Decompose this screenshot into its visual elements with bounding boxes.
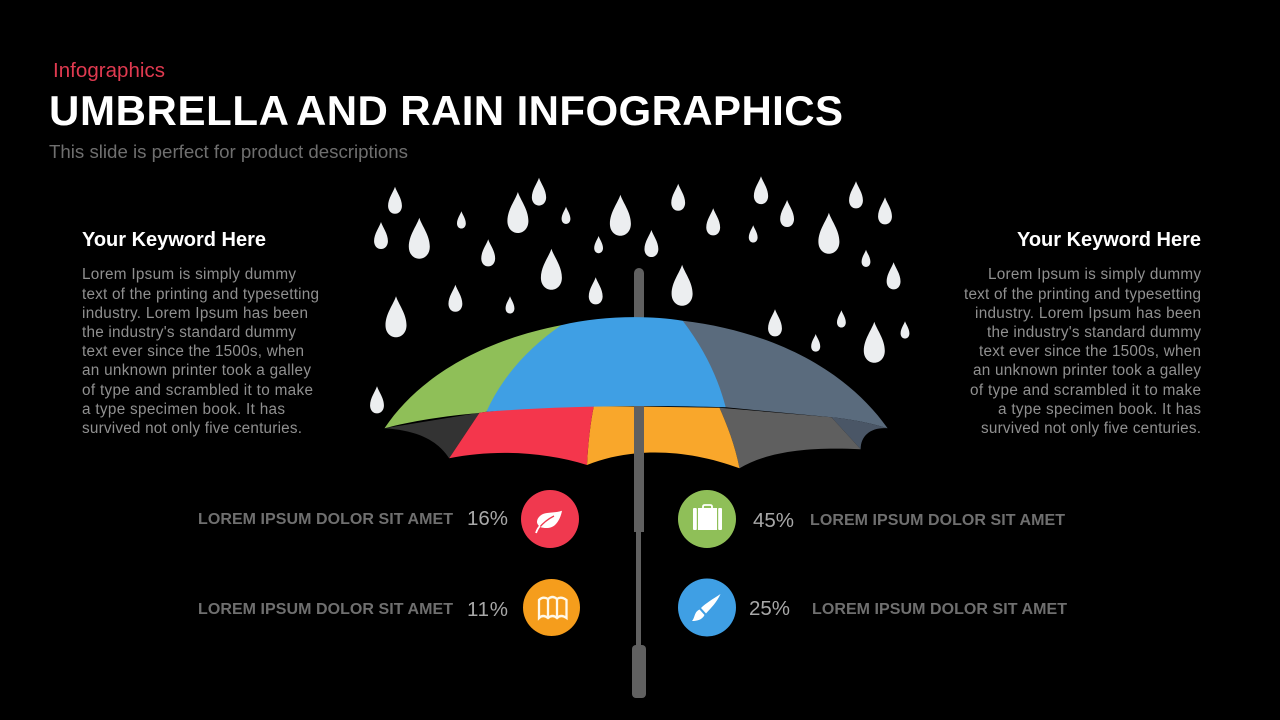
title: AND RAIN INFOGRAPHICS <box>296 87 843 134</box>
icon: map <box>523 579 580 636</box>
umbrella panel: dark slate flap <box>831 417 888 449</box>
icon: paint brush <box>678 578 736 636</box>
item: 45% <box>678 490 1065 548</box>
label: LOREM IPSUM DOLOR SIT AMET <box>812 601 1067 618</box>
left body text: industry. Lorem Ipsum has been <box>82 305 308 322</box>
value: 25% <box>749 597 790 620</box>
item: 25% <box>678 578 1067 636</box>
right body text: survived not only five centuries. <box>981 420 1201 437</box>
right body text: text of the printing and typesetting <box>964 286 1201 303</box>
icon: leaf <box>521 490 579 548</box>
value: 11% <box>467 598 508 621</box>
umbrella panel: green <box>384 325 600 428</box>
label: LOREM IPSUM DOLOR SIT AMET <box>810 512 1065 529</box>
umbrella panel: slate <box>683 321 888 428</box>
left body text: survived not only five centuries. <box>82 420 302 437</box>
umbrella panel: orange <box>587 406 740 468</box>
left body text: text of the printing and typesetting <box>82 286 319 303</box>
rain drops <box>370 176 909 413</box>
left body text: the industry's standard dummy <box>82 324 296 341</box>
left body text <box>82 266 319 437</box>
umbrella panel: blue <box>486 317 726 412</box>
umbrella panel: dark left <box>384 413 480 458</box>
item: 16% <box>198 490 579 548</box>
umbrella shaft lower <box>636 530 641 648</box>
subtitle: This slide is perfect for product descriptions <box>49 141 408 162</box>
left text block <box>82 229 319 437</box>
right body text: a type specimen book. It has <box>998 401 1201 418</box>
value: 45% <box>753 509 794 532</box>
left body text: an unknown printer took a galley <box>82 362 311 379</box>
left body text: a type specimen book. It has <box>82 401 285 418</box>
umbrella panel: red <box>449 406 594 465</box>
item: 11% <box>198 579 580 636</box>
value: 16% <box>467 507 508 530</box>
right body text: of type and scrambled it to make <box>970 382 1201 399</box>
right text block <box>964 229 1201 437</box>
left body text: of type and scrambled it to make <box>82 382 313 399</box>
umbrella <box>384 268 888 698</box>
left body text: Lorem Ipsum is simply dummy <box>82 266 296 283</box>
right body text: industry. Lorem Ipsum has been <box>975 305 1201 322</box>
right body text: the industry's standard dummy <box>987 324 1201 341</box>
right body text: an unknown printer took a galley <box>973 362 1201 379</box>
umbrella handle <box>632 645 646 698</box>
umbrella shaft upper <box>634 406 644 532</box>
title <box>49 87 843 134</box>
left heading: Your Keyword Here <box>82 229 266 251</box>
umbrella panel: gray <box>720 408 861 468</box>
right body text: text ever since the 1500s, when <box>979 343 1201 360</box>
umbrella pole top <box>634 268 644 328</box>
right heading: Your Keyword Here <box>1017 229 1201 251</box>
right body text: Lorem Ipsum is simply dummy <box>988 266 1201 283</box>
icon: briefcase <box>678 490 736 548</box>
left body text: text ever since the 1500s, when <box>82 343 304 360</box>
right body text <box>964 266 1201 437</box>
label: LOREM IPSUM DOLOR SIT AMET <box>198 601 453 618</box>
label: LOREM IPSUM DOLOR SIT AMET <box>198 511 453 528</box>
title: UMBRELLA <box>49 87 289 134</box>
eyebrow label: Infographics <box>53 59 165 82</box>
